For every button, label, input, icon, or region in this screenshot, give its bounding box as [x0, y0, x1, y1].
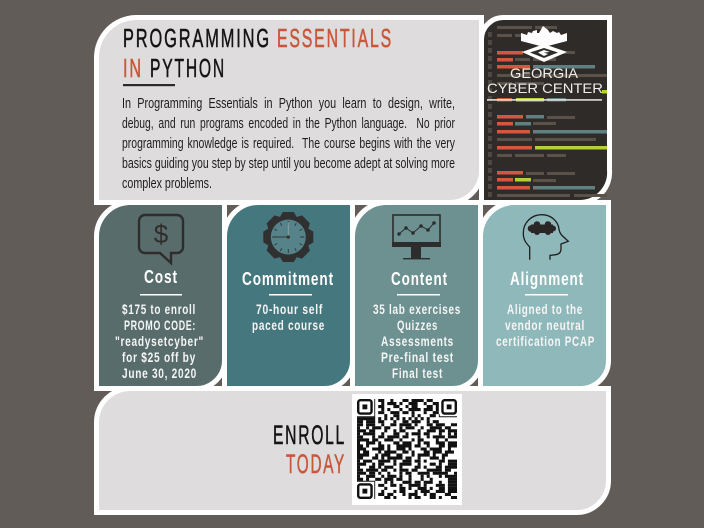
text block: course description: basics guiding you step by step until you become adept at solving more — [122, 155, 455, 172]
heading: content: Content — [391, 269, 448, 289]
text block: alignment details: Aligned to the — [507, 301, 583, 317]
text block: content details: Quizzes — [397, 317, 438, 333]
text block: commitment details: paced course — [252, 317, 325, 333]
panel: Georgia Cyber Center code image — [481, 17, 610, 203]
text block: content details: Final test — [392, 365, 443, 381]
text block: content details: Pre-final test — [381, 349, 454, 365]
text block: alignment details — [496, 301, 595, 349]
text block: cost details: PROMO CODE: — [124, 317, 196, 333]
heading: enroll today: ENROLL — [273, 420, 346, 450]
heading: commitment: Commitment — [242, 269, 334, 289]
text block: cost details: $175 to enroll — [122, 301, 196, 317]
logo: Georgia Cyber Center: GEORGIA — [510, 65, 579, 81]
logo: Georgia Cyber Center — [487, 26, 603, 101]
panel: alignment — [480, 202, 609, 389]
icon: head with puzzle piece — [523, 215, 568, 260]
QR code — [352, 394, 462, 505]
text block: cost details: for $25 off by — [122, 349, 196, 365]
title — [123, 23, 393, 86]
text block: course description: In Programming Essentials in Python you learn to design, write, — [122, 95, 455, 112]
text block: course description — [122, 95, 455, 192]
title: IN — [123, 53, 143, 83]
text block: course description: complex problems. — [122, 175, 212, 192]
panel: cost — [96, 202, 225, 389]
text block: content details — [373, 301, 461, 381]
text block: cost details — [115, 301, 204, 381]
panel: enroll — [96, 388, 609, 513]
text block: content details: Assessments — [381, 333, 454, 349]
heading: cost: Cost — [144, 267, 178, 287]
text block: alignment details: certification PCAP — [496, 333, 595, 349]
text block: commitment details: 70-hour self — [256, 301, 323, 317]
icon: speech bubble with dollar — [139, 215, 183, 263]
heading: alignment: Alignment — [510, 269, 584, 289]
text block: commitment details — [252, 301, 325, 333]
panel: intro — [96, 18, 482, 203]
heading: enroll today — [273, 420, 346, 479]
text block: cost details: June 30, 2020 — [122, 365, 197, 381]
panel: content — [352, 202, 481, 389]
code line bars — [490, 26, 607, 198]
text block: cost details: "readysetcyber" — [115, 333, 204, 349]
panel: commitment — [224, 202, 353, 389]
logo: Georgia Cyber Center: CYBER CENTER — [487, 80, 603, 96]
icon: speech bubble with dollar: $ — [154, 219, 169, 249]
title: PYTHON — [150, 53, 226, 83]
text block: course description: programming knowledge is required. The course begins with the very — [122, 135, 455, 152]
heading: enroll today: TODAY — [286, 449, 346, 479]
title: ESSENTIALS — [277, 23, 393, 53]
icon: monitor with line chart — [392, 215, 441, 259]
text block: content details: 35 lab exercises — [373, 301, 461, 317]
text block: course description: debug, and run programs encoded in the Python language. No prior — [122, 115, 455, 132]
title: PROGRAMMING — [123, 23, 271, 53]
icon: gear clock — [263, 212, 313, 262]
text block: alignment details: vendor neutral — [505, 317, 585, 333]
